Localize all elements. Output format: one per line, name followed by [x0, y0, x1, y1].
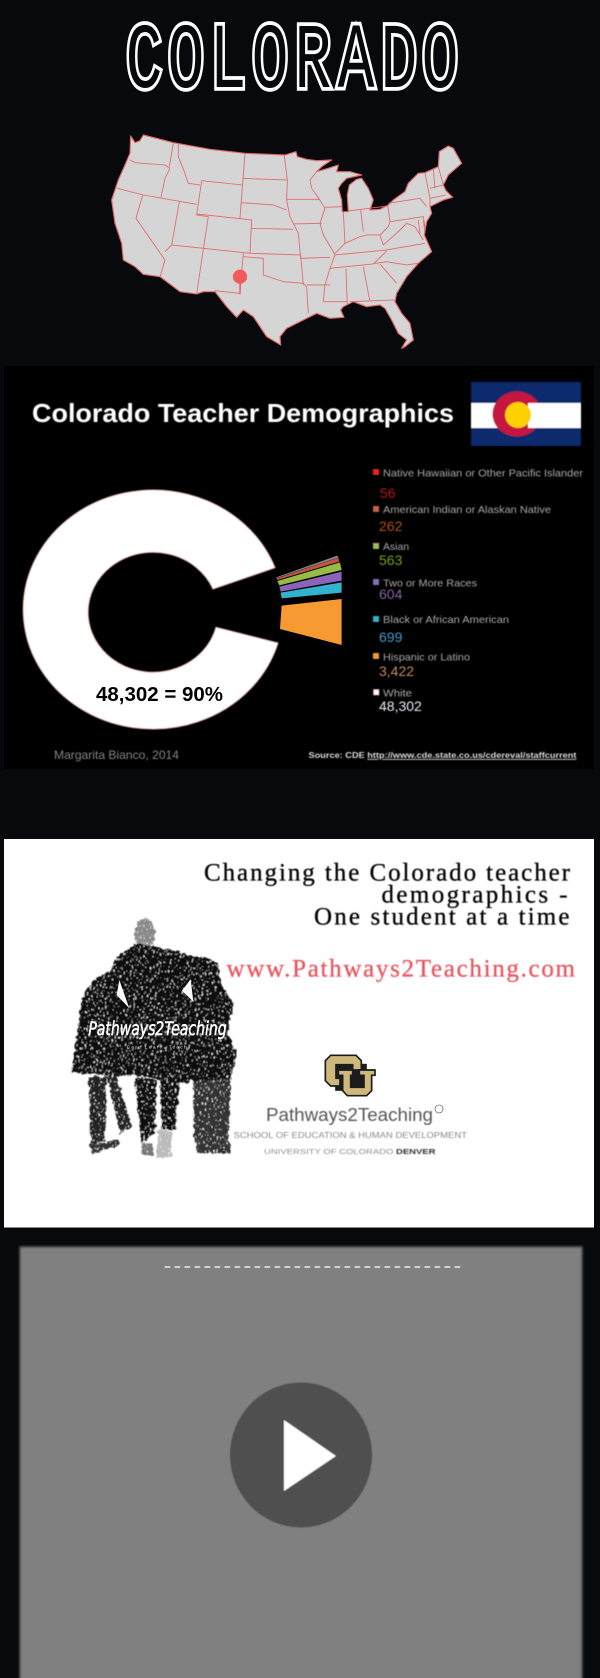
legend item: Native Hawaiian: Native Hawaiian or Other Pacific Islander — [383, 468, 584, 480]
legend item: American Indian — [373, 504, 551, 534]
chart slices: minority groups — [276, 556, 342, 645]
heading text: One student at a time — [314, 904, 570, 931]
chart: donut of teacher race and ethnicity — [23, 490, 342, 729]
photo: teacher and two students seen from behind — [72, 919, 237, 1158]
title: COLORADO — [126, 9, 458, 115]
legend item: White: 48,302 — [379, 698, 422, 714]
panel: video placeholder — [20, 1247, 582, 1678]
heading: Colorado Teacher Demographics — [32, 398, 454, 428]
legend item: Two or more races — [373, 578, 477, 602]
legend item: Hispanic — [373, 652, 470, 679]
legend item: Two or more races: Two or More Races — [383, 578, 477, 590]
icon: play button — [230, 1382, 372, 1528]
icon: location pin — [233, 270, 247, 294]
legend item: Black — [373, 614, 509, 645]
photo caption — [88, 1019, 227, 1049]
school line: SCHOOL OF EDUCATION & HUMAN DEVELOPMENT — [234, 1130, 468, 1140]
website link: www.Pathways2Teaching.com — [226, 956, 576, 983]
heading text: Changing the Colorado teacher — [204, 860, 571, 887]
legend item: White — [374, 688, 422, 714]
legend item: Black: Black or African American — [383, 614, 509, 626]
panel: Pathways2Teaching — [4, 839, 594, 1228]
legend item: Native Hawaiian — [373, 468, 584, 501]
legend item: Asian — [373, 541, 409, 568]
legend item: Asian: Asian — [383, 541, 409, 553]
legend — [373, 468, 584, 714]
map: United States with state borders — [112, 135, 462, 348]
legend item: American Indian: American Indian or Alaskan Native — [383, 504, 551, 516]
legend item: American Indian: 262 — [379, 518, 403, 534]
credit: Margarita Bianco, 2014 — [54, 748, 179, 762]
legend item: Black: 699 — [379, 629, 403, 645]
legend item: Native Hawaiian: 56 — [380, 485, 396, 501]
logo wordmark: Pathways2Teaching — [266, 1105, 433, 1125]
panel: Colorado teacher demographics — [4, 366, 594, 769]
heading text: demographics - — [382, 882, 568, 909]
photo caption: Care Learn iTeach — [127, 1044, 187, 1049]
icon: Colorado flag — [471, 382, 581, 446]
legend item: Hispanic: Hispanic or Latino — [383, 652, 470, 664]
photo caption: Pathways2Teaching — [88, 1019, 227, 1040]
heading text — [204, 860, 571, 931]
legend item: Two or more races: 604 — [379, 586, 403, 602]
source: Source: CDE http://www.cde.state.co.us/cdereval/staffcurrent — [308, 750, 577, 760]
legend item: Asian: 563 — [379, 552, 403, 568]
chart label: white share: 48,302 = 90% — [96, 684, 223, 706]
legend item: Hispanic: 3,422 — [379, 663, 414, 679]
university line: UNIVERSITY OF COLORADO DENVER — [264, 1147, 436, 1156]
trademark mark — [435, 1105, 443, 1113]
title: COLORADO — [126, 9, 458, 115]
icon: CU logo — [325, 1055, 375, 1096]
legend item: White: White — [383, 688, 412, 700]
